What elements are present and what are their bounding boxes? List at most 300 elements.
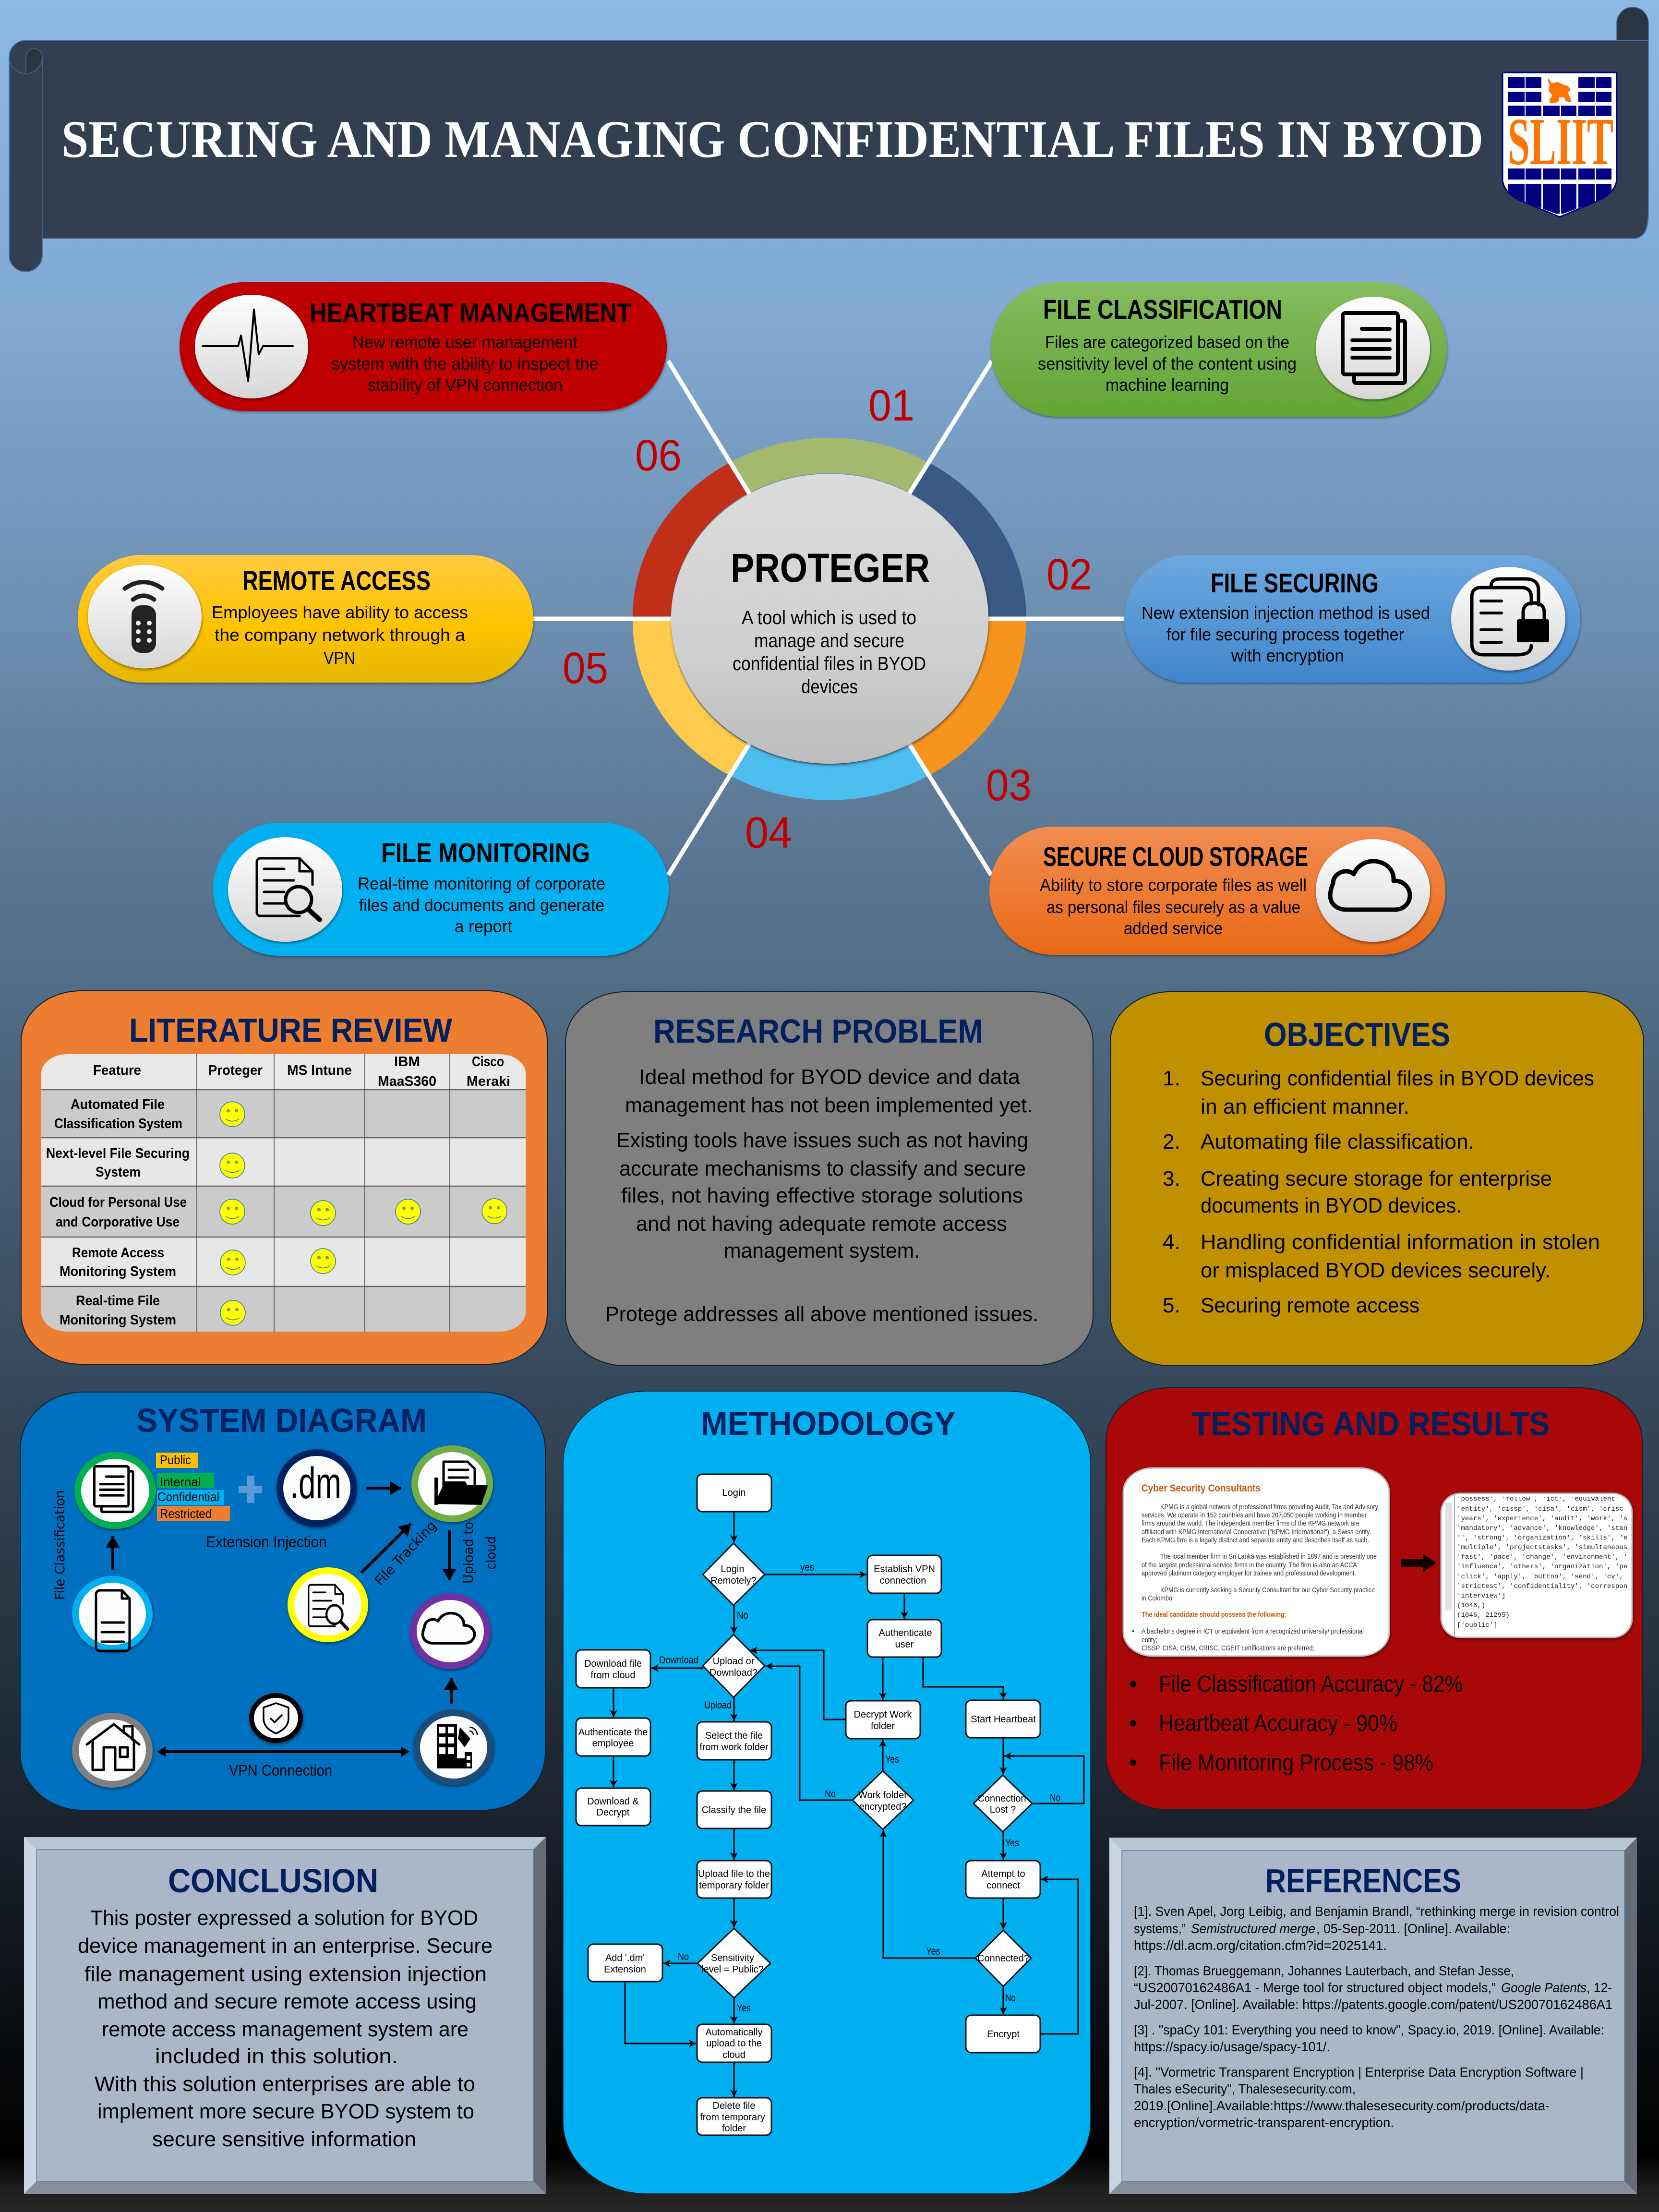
- decision: sensitivity level: [697, 1928, 770, 1998]
- box: delete file: [697, 2098, 771, 2135]
- table header: IBM: [394, 1054, 420, 1070]
- box: download and decrypt: Decrypt: [597, 1807, 630, 1818]
- box: upload to temporary folder: Upload file to the: [698, 1869, 770, 1879]
- arrow: upload: [448, 1530, 451, 1580]
- decision labels: [659, 1562, 1060, 2014]
- screenshot: console output: 'entity', 'cissp', 'cisa', 'cism', 'crisc: [1457, 1505, 1623, 1513]
- box: attempt to connect: connect: [986, 1880, 1020, 1891]
- screenshot: console output: '', 'strong', 'organization', 'skills', 'e: [1457, 1534, 1627, 1542]
- screenshot: job posting input: KPMG is a global network of professional firms providing Audit, Tax and Advisory: [1160, 1503, 1378, 1511]
- table feature rows: System: [96, 1165, 141, 1180]
- reference list: systems,”: [1134, 1921, 1186, 1936]
- heading: SECURE CLOUD STORAGE: [1043, 842, 1308, 872]
- body text: Existing tools have issues such as not having: [616, 1129, 1028, 1152]
- arrow: extension to folder: [366, 1487, 401, 1490]
- box: attempt to connect: Attempt to: [981, 1869, 1025, 1879]
- box: start heartbeat: [966, 1700, 1040, 1738]
- box: establish VPN: Establish VPN: [874, 1564, 935, 1575]
- description: as personal files securely as a value: [1046, 897, 1300, 917]
- decision labels: Yes: [1005, 1838, 1019, 1849]
- header scroll banner: [9, 7, 1648, 272]
- decision labels: Yes: [737, 2003, 751, 2014]
- reference list: [1]. Sven Apel, Jorg Leibig, and Benjamin Brandl, “rethinking merge in revision control: [1134, 1904, 1619, 1919]
- body text: included in this solution.: [155, 2044, 398, 2068]
- body text: management has not been implemented yet.: [625, 1094, 1033, 1117]
- panel: conclusion: [24, 1837, 546, 2194]
- decision labels: Yes: [926, 1946, 940, 1957]
- table feature rows: and Corporative Use: [56, 1214, 180, 1230]
- decision: upload or download: [703, 1635, 765, 1697]
- body text: secure sensitive information: [152, 2128, 416, 2151]
- screenshot: job posting input: in Colombo: [1142, 1594, 1172, 1602]
- decision labels: No: [1050, 1792, 1060, 1803]
- classification labels: Restricted: [160, 1506, 212, 1521]
- decision labels: Download: [659, 1655, 698, 1666]
- decision: upload or download: Download?: [709, 1668, 757, 1678]
- screenshot: console output: 'fast', 'pace', 'change', 'environment', ': [1457, 1553, 1627, 1561]
- description: machine learning: [1106, 375, 1229, 395]
- body text: files, not having effective storage solutions: [621, 1184, 1023, 1207]
- screenshot: console output: 'interview']: [1457, 1592, 1505, 1600]
- reference list: https://dl.acm.org/citation.cfm?id=2025141.: [1134, 1938, 1387, 1953]
- box: automatically upload: [697, 2024, 771, 2062]
- icon: cloud: [1316, 839, 1430, 942]
- box: start heartbeat: Start Heartbeat: [971, 1714, 1036, 1725]
- decision: upload or download: Upload or: [713, 1656, 755, 1667]
- number 04: 04: [745, 808, 792, 857]
- numbered list: 2.: [1163, 1130, 1180, 1154]
- arrow heads for VPN link: [157, 1746, 409, 1757]
- decision: sensitivity level: level = Public?: [701, 1964, 764, 1975]
- screenshot: job posting input: KPMG is currently seeking a Security Consultant for our Cyber Security practice: [1160, 1586, 1375, 1594]
- label: file classification: File Classification: [52, 1490, 68, 1600]
- node: .dm extension: [280, 1453, 354, 1524]
- hub text: [733, 607, 926, 697]
- description: added service: [1124, 918, 1223, 938]
- decision labels: Upload: [704, 1700, 732, 1711]
- screenshot: job posting input: [1123, 1468, 1389, 1656]
- body text: Protege addresses all above mentioned issues.: [605, 1302, 1038, 1326]
- screenshot: job posting input: services. We operate in 152 countries and have 207,050 people working in member: [1142, 1511, 1367, 1519]
- heading: OBJECTIVES: [1264, 1016, 1450, 1053]
- flowchart: [576, 1474, 1084, 2135]
- table feature rows: Real-time File: [76, 1293, 160, 1309]
- ring segment 02: [910, 461, 1026, 619]
- classification labels: Internal: [160, 1475, 201, 1489]
- comparison table: [41, 1054, 526, 1332]
- box: add dm extension: [588, 1944, 662, 1982]
- reference list: , 12-: [1587, 1980, 1612, 1995]
- screenshot: job posting input: A bachelor's degree in ICT or equivalent from a recognized university/ professional: [1142, 1627, 1364, 1635]
- reference list: [1134, 1904, 1619, 2130]
- box: download and decrypt: Download &: [587, 1796, 639, 1807]
- decision labels: No: [678, 1951, 689, 1962]
- hub text: confidential files in BYOD: [733, 653, 926, 674]
- decision: connection lost: [974, 1775, 1032, 1832]
- reference list: Jul-2007. [Online]. Available: https://patents.google.com/patent/US20070162486A1: [1134, 1997, 1612, 2012]
- box: add dm extension: Add '.dm': [605, 1953, 645, 1963]
- decision: login remotely: [703, 1543, 765, 1605]
- label: upload to cloud: [460, 1522, 499, 1584]
- hub disc: [671, 474, 988, 764]
- arrow: input to output: [1401, 1554, 1436, 1572]
- number 01: 01: [868, 381, 914, 430]
- heading: SYSTEM DIAGRAM: [136, 1402, 427, 1439]
- label: upload to cloud: Upload to: [460, 1522, 476, 1584]
- box: decrypt work folder: Decrypt Work: [854, 1709, 912, 1720]
- screenshot: job posting input: affiliated with KPMG International Cooperative ("KPMG International"), a Swiss entity.: [1142, 1528, 1371, 1536]
- screenshot: console output: 'strictest', 'confidentiality', 'correspon: [1457, 1583, 1627, 1590]
- heading: REFERENCES: [1265, 1862, 1461, 1899]
- screenshot: job posting input: firms around the world. The independent member firms of the KPMG network are: [1142, 1519, 1359, 1527]
- decision: connected: [975, 1930, 1031, 1986]
- ring segment 04: [732, 745, 926, 800]
- reference list: 2019.[Online].Available:https://www.thalesesecurity.com/products/data-: [1134, 2098, 1550, 2113]
- heading: REMOTE ACCESS: [242, 565, 431, 596]
- body text: management system.: [724, 1239, 920, 1262]
- decision: work folder encrypted: encrypted?: [859, 1802, 906, 1812]
- numbered list: documents in BYOD devices.: [1201, 1194, 1462, 1217]
- arrow: enterprise to cloud: [450, 1678, 453, 1704]
- description: [212, 602, 468, 668]
- description: New remote user management: [352, 332, 577, 352]
- label: file tracking: File Tracking: [372, 1517, 439, 1589]
- classification labels: Public: [160, 1453, 191, 1467]
- panel: methodology: [563, 1391, 1091, 2194]
- numbered list: 1.: [1163, 1067, 1180, 1090]
- heading: HEARTBEAT MANAGEMENT: [310, 298, 631, 328]
- decision: login remotely: Login: [721, 1564, 744, 1575]
- arrow: file to classification: [111, 1536, 114, 1570]
- results list: •: [1129, 1711, 1137, 1736]
- numbered list: [1163, 1067, 1600, 1317]
- description: a report: [455, 916, 512, 936]
- description: Employees have ability to access: [212, 602, 468, 622]
- body text: [78, 1906, 493, 2151]
- screenshot: job posting input: approved platinum category employer for trainee and professional development.: [1142, 1569, 1356, 1577]
- icon: remote control: [88, 565, 202, 668]
- decision: work folder encrypted: [853, 1771, 914, 1829]
- box: authenticate user: Authenticate: [878, 1628, 932, 1638]
- screenshot: console output: [1441, 1493, 1632, 1637]
- table header: Proteger: [208, 1063, 263, 1078]
- pill: file securing: [1124, 555, 1580, 683]
- pill: file monitoring: [213, 823, 669, 956]
- label: upload to cloud: cloud: [483, 1536, 499, 1570]
- box: authenticate the employee: employee: [592, 1738, 634, 1749]
- heading: RESEARCH PROBLEM: [653, 1012, 983, 1050]
- box: authenticate the employee: [576, 1718, 650, 1756]
- box: classify the file: [697, 1791, 771, 1828]
- reference list: , 05-Sep-2011. [Online]. Available:: [1316, 1921, 1510, 1936]
- number 02: 02: [1046, 550, 1092, 599]
- hub title: PROTEGER: [731, 545, 930, 590]
- description: Files are categorized based on the: [1045, 332, 1289, 352]
- box: automatically upload: Automatically: [706, 2027, 762, 2038]
- body text: [605, 1065, 1038, 1326]
- numbered list: 4.: [1163, 1230, 1180, 1254]
- reference list: [3] . "spaCy 101: Everything you need to know", Spacy.io, 2019. [Online]. Available:: [1134, 2022, 1604, 2037]
- decision labels: No: [825, 1789, 836, 1800]
- screenshot: console output: ['public']: [1457, 1622, 1498, 1629]
- results list: Heartbeat Accuracy - 90%: [1159, 1711, 1397, 1736]
- node: enterprise building: [417, 1713, 491, 1782]
- screenshot: console output: 'influence', 'others', 'organization', 'pe: [1457, 1563, 1627, 1571]
- box: select the file: [697, 1722, 771, 1760]
- box: automatically upload: upload to the: [706, 2038, 762, 2049]
- decision labels: Yes: [885, 1754, 899, 1765]
- hub text: manage and secure: [754, 630, 904, 651]
- panel: testing and results: [1106, 1388, 1642, 1810]
- node: source file: [75, 1579, 149, 1651]
- reference list: [2]. Thomas Brueggemann, Johannes Lauterbach, and Stefan Jesse,: [1134, 1963, 1514, 1978]
- table feature rows: Next-level File Securing: [46, 1146, 190, 1161]
- table header: Meraki: [467, 1074, 510, 1089]
- box: delete file: Delete file: [713, 2101, 755, 2111]
- pill: remote access: [78, 555, 533, 683]
- results list: [1129, 1671, 1463, 1776]
- numbered list: Automating file classification.: [1201, 1130, 1474, 1154]
- numbered list: 5.: [1163, 1294, 1180, 1317]
- panel: references: [1109, 1838, 1637, 2194]
- screenshot: job posting input: Cyber Security Consultants: [1142, 1483, 1261, 1494]
- screenshot: console output: 'years', 'experience', 'audit', 'work', 's: [1457, 1515, 1627, 1523]
- node: classified documents: [78, 1455, 153, 1526]
- table header: Feature: [93, 1063, 141, 1078]
- decision: connected: Connected?: [977, 1953, 1029, 1964]
- central PROTEGER hub: [533, 361, 1126, 875]
- description: system with the ability to inspect the: [331, 354, 599, 373]
- heading: TESTING AND RESULTS: [1192, 1405, 1550, 1443]
- reference list: Thales eSecurity", Thalesesecurity.com,: [1134, 2081, 1356, 2096]
- box: establish VPN: connection: [880, 1575, 926, 1586]
- ring segment 05: [633, 619, 749, 777]
- decision labels: No: [737, 1610, 748, 1621]
- panel: objectives: [1110, 992, 1644, 1366]
- description: Real-time monitoring of corporate: [358, 874, 605, 893]
- description: the company network through a: [215, 625, 466, 645]
- table feature rows: Automated File: [71, 1097, 165, 1112]
- box: login: [697, 1474, 771, 1512]
- screenshot: console output: 'mandatory', 'advance', 'knowledge', 'stan: [1457, 1525, 1627, 1532]
- numbered list: 3.: [1163, 1167, 1180, 1190]
- table header: MS Intune: [287, 1063, 352, 1078]
- pill: file classification: [991, 282, 1447, 417]
- node: home: [75, 1716, 149, 1784]
- ring segment 01: [732, 438, 926, 493]
- classification labels: [156, 1453, 230, 1521]
- reference list: “US20070162486A1 - Merge tool for structured object models,”: [1134, 1980, 1496, 1995]
- box: classify the file: Classify the file: [702, 1805, 766, 1815]
- hub text: A tool which is used to: [742, 607, 916, 628]
- table header: Cisco: [472, 1054, 504, 1070]
- box: download file from cloud: from cloud: [590, 1670, 636, 1681]
- table feature rows: [46, 1097, 190, 1328]
- pill: heartbeat management: [180, 282, 667, 411]
- label: extension injection: Extension Injection: [206, 1533, 327, 1551]
- box: login: Login: [722, 1488, 745, 1498]
- box: delete file: from temporary: [700, 2112, 765, 2123]
- box: delete file: folder: [722, 2123, 746, 2134]
- body text: file management using extension injection: [84, 1962, 487, 1986]
- box: automatically upload: cloud: [722, 2050, 745, 2060]
- label: VPN connection: VPN Connection: [229, 1762, 332, 1779]
- screenshot: job posting input: entity;: [1142, 1636, 1157, 1644]
- hub text: devices: [801, 676, 858, 697]
- icon: heartbeat: [195, 295, 308, 398]
- screenshot: job posting input: The local member firm in Sri Lanka was established in 1897 and is presently one: [1160, 1552, 1377, 1561]
- screenshot: job posting input: Each KPMG firm is a legally distinct and separate entity and describes itself as such.: [1142, 1536, 1369, 1544]
- body text: method and secure remote access using: [97, 1990, 477, 2013]
- icon: SLIIT logo shield: SLIIT: [1508, 105, 1613, 179]
- reference list: encryption/vormetric-transparent-encryption.: [1134, 2115, 1394, 2130]
- node: .dm extension: .dm: [290, 1459, 341, 1508]
- node: file monitoring: [291, 1571, 365, 1639]
- decision labels: No: [1005, 1993, 1016, 2004]
- number 06: 06: [635, 431, 682, 480]
- body text: device management in an enterprise. Secure: [78, 1934, 493, 1958]
- heading: FILE SECURING: [1211, 568, 1379, 599]
- heading: LITERATURE REVIEW: [129, 1011, 452, 1049]
- results list: •: [1129, 1671, 1137, 1697]
- number 03: 03: [986, 761, 1032, 810]
- connector spokes: [533, 361, 1126, 875]
- box: select the file: from work folder: [699, 1742, 769, 1753]
- table header: MaaS360: [378, 1074, 436, 1089]
- table feature rows: Monitoring System: [60, 1312, 176, 1328]
- screenshot: console output: 'possess', 'follow', 'ict', 'equivalent': [1457, 1495, 1619, 1503]
- results list: •: [1129, 1750, 1137, 1776]
- box: download file from cloud: Download file: [584, 1659, 642, 1669]
- box: authenticate user: [867, 1620, 941, 1657]
- decision labels: yes: [800, 1562, 814, 1573]
- screenshot: console output: (1046,): [1457, 1602, 1485, 1610]
- screenshot: console output: (1046, 21295): [1457, 1611, 1510, 1619]
- body text: This poster expressed a solution for BYOD: [90, 1906, 478, 1930]
- title: SECURING AND MANAGING CONFIDENTIAL FILES IN BYOD: [61, 110, 1483, 168]
- node: cloud: [413, 1597, 487, 1666]
- numbered list: Handling confidential information in stolen: [1201, 1230, 1600, 1254]
- box: encrypt: Encrypt: [987, 2029, 1020, 2040]
- box: decrypt work folder: folder: [871, 1721, 895, 1731]
- screenshot: job posting input: CISSP, CISA, CISM, CRISC, CGEIT certifications are preferred;: [1142, 1644, 1314, 1652]
- ring segment 03: [910, 619, 1026, 777]
- box: encrypt: [966, 2015, 1040, 2053]
- numbered list: Securing remote access: [1201, 1294, 1419, 1317]
- description: files and documents and generate: [359, 895, 604, 915]
- heading: FILE MONITORING: [381, 838, 590, 868]
- numbered list: in an efficient manner.: [1201, 1095, 1409, 1118]
- reference list: [4]. "Vormetric Transparent Encryption | Enterprise Data Encryption Software |: [1134, 2065, 1584, 2080]
- box: select the file: Select the file: [705, 1731, 763, 1741]
- reference list: Google Patents: [1501, 1980, 1587, 1995]
- node: vpn shield: [252, 1695, 301, 1741]
- description: [358, 874, 605, 936]
- box: upload to temporary folder: temporary folder: [699, 1880, 769, 1891]
- box: download file from cloud: [576, 1650, 650, 1688]
- description: [1040, 875, 1307, 938]
- body text: and not having adequate remote access: [636, 1212, 1007, 1236]
- screenshot: job posting input: The ideal candidate should possess the following:: [1142, 1611, 1286, 1619]
- icon: documents: [1316, 297, 1430, 399]
- description: [1142, 603, 1430, 665]
- description: for file securing process together: [1166, 625, 1404, 644]
- decision: connection lost: Connection: [977, 1793, 1026, 1804]
- icon: locked file: [1451, 567, 1565, 671]
- description: with encryption: [1231, 646, 1344, 665]
- description: Ability to store corporate files as well: [1040, 875, 1307, 895]
- number 05: 05: [563, 644, 608, 693]
- screenshot: console output: 'multiple', 'projectstasks', 'simultaneous: [1457, 1544, 1627, 1551]
- body text: implement more secure BYOD system to: [97, 2100, 474, 2123]
- decision: connection lost: Lost ?: [990, 1804, 1016, 1815]
- reference list: Semistructured merge: [1191, 1921, 1315, 1936]
- description: VPN: [324, 648, 355, 668]
- heading: METHODOLOGY: [701, 1405, 956, 1442]
- node: secured folder: [415, 1449, 490, 1519]
- screenshot: console output: 'click', 'apply', 'button', 'send', 'cv',: [1457, 1573, 1623, 1581]
- table feature rows: Remote Access: [72, 1245, 164, 1261]
- smiley ticks: [220, 1102, 507, 1325]
- description: [1038, 332, 1297, 395]
- arrow: VPN connection: [165, 1750, 401, 1753]
- icon: document search: [228, 837, 342, 942]
- results list: File Classification Accuracy - 82%: [1159, 1671, 1463, 1697]
- box: decrypt work folder: [846, 1701, 920, 1739]
- numbered list: Securing confidential files in BYOD devices: [1201, 1067, 1594, 1090]
- results list: File Monitoring Process - 98%: [1159, 1750, 1433, 1776]
- panel: system diagram: [20, 1392, 545, 1810]
- decision: sensitivity level: Sensitivity: [711, 1953, 754, 1963]
- table feature rows: Classification System: [54, 1116, 182, 1131]
- box: authenticate the employee: Authenticate the: [578, 1727, 648, 1738]
- decision: work folder encrypted: Work folder: [858, 1790, 907, 1801]
- icon: plus: [239, 1476, 262, 1503]
- panel: literature review: [21, 991, 547, 1364]
- body text: Ideal method for BYOD device and data: [639, 1065, 1021, 1089]
- box: authenticate user: user: [895, 1639, 914, 1650]
- heading: CONCLUSION: [168, 1862, 378, 1899]
- ring segment 06: [633, 461, 749, 619]
- numbered list: Creating secure storage for enterprise: [1201, 1167, 1552, 1190]
- reference list: https://spacy.io/usage/spacy-101/.: [1134, 2039, 1330, 2054]
- decision: login remotely: Remotely?: [710, 1575, 757, 1586]
- pill: secure cloud storage: [989, 827, 1445, 955]
- table feature rows: Cloud for Personal Use: [49, 1195, 187, 1210]
- numbered list: or misplaced BYOD devices securely.: [1201, 1259, 1551, 1282]
- body text: With this solution enterprises are able to: [95, 2072, 475, 2096]
- description: New extension injection method is used: [1142, 603, 1430, 623]
- heading: FILE CLASSIFICATION: [1043, 294, 1282, 325]
- screenshot: job posting input: of the largest professional service firms in the country. The firm is also an ACCA: [1142, 1561, 1357, 1569]
- body text: accurate mechanisms to classify and secure: [619, 1157, 1026, 1180]
- arrow: file tracking: [361, 1524, 411, 1573]
- box: upload to temporary folder: [697, 1861, 771, 1898]
- box: add dm extension: Extension: [604, 1964, 646, 1975]
- screenshot: job posting input: •: [1132, 1627, 1134, 1635]
- table feature rows: Monitoring System: [60, 1264, 176, 1279]
- panel: research problem: [565, 992, 1093, 1366]
- description: [331, 332, 599, 395]
- box: establish VPN: [867, 1555, 941, 1593]
- connectors: [613, 1512, 1084, 2097]
- box: attempt to connect: [966, 1861, 1040, 1898]
- classification labels: Confidential: [157, 1490, 219, 1504]
- description: sensitivity level of the content using: [1038, 354, 1297, 373]
- table header: [93, 1054, 510, 1089]
- box: download and decrypt: [576, 1788, 650, 1826]
- icon: SLIIT logo shield: [1503, 72, 1617, 217]
